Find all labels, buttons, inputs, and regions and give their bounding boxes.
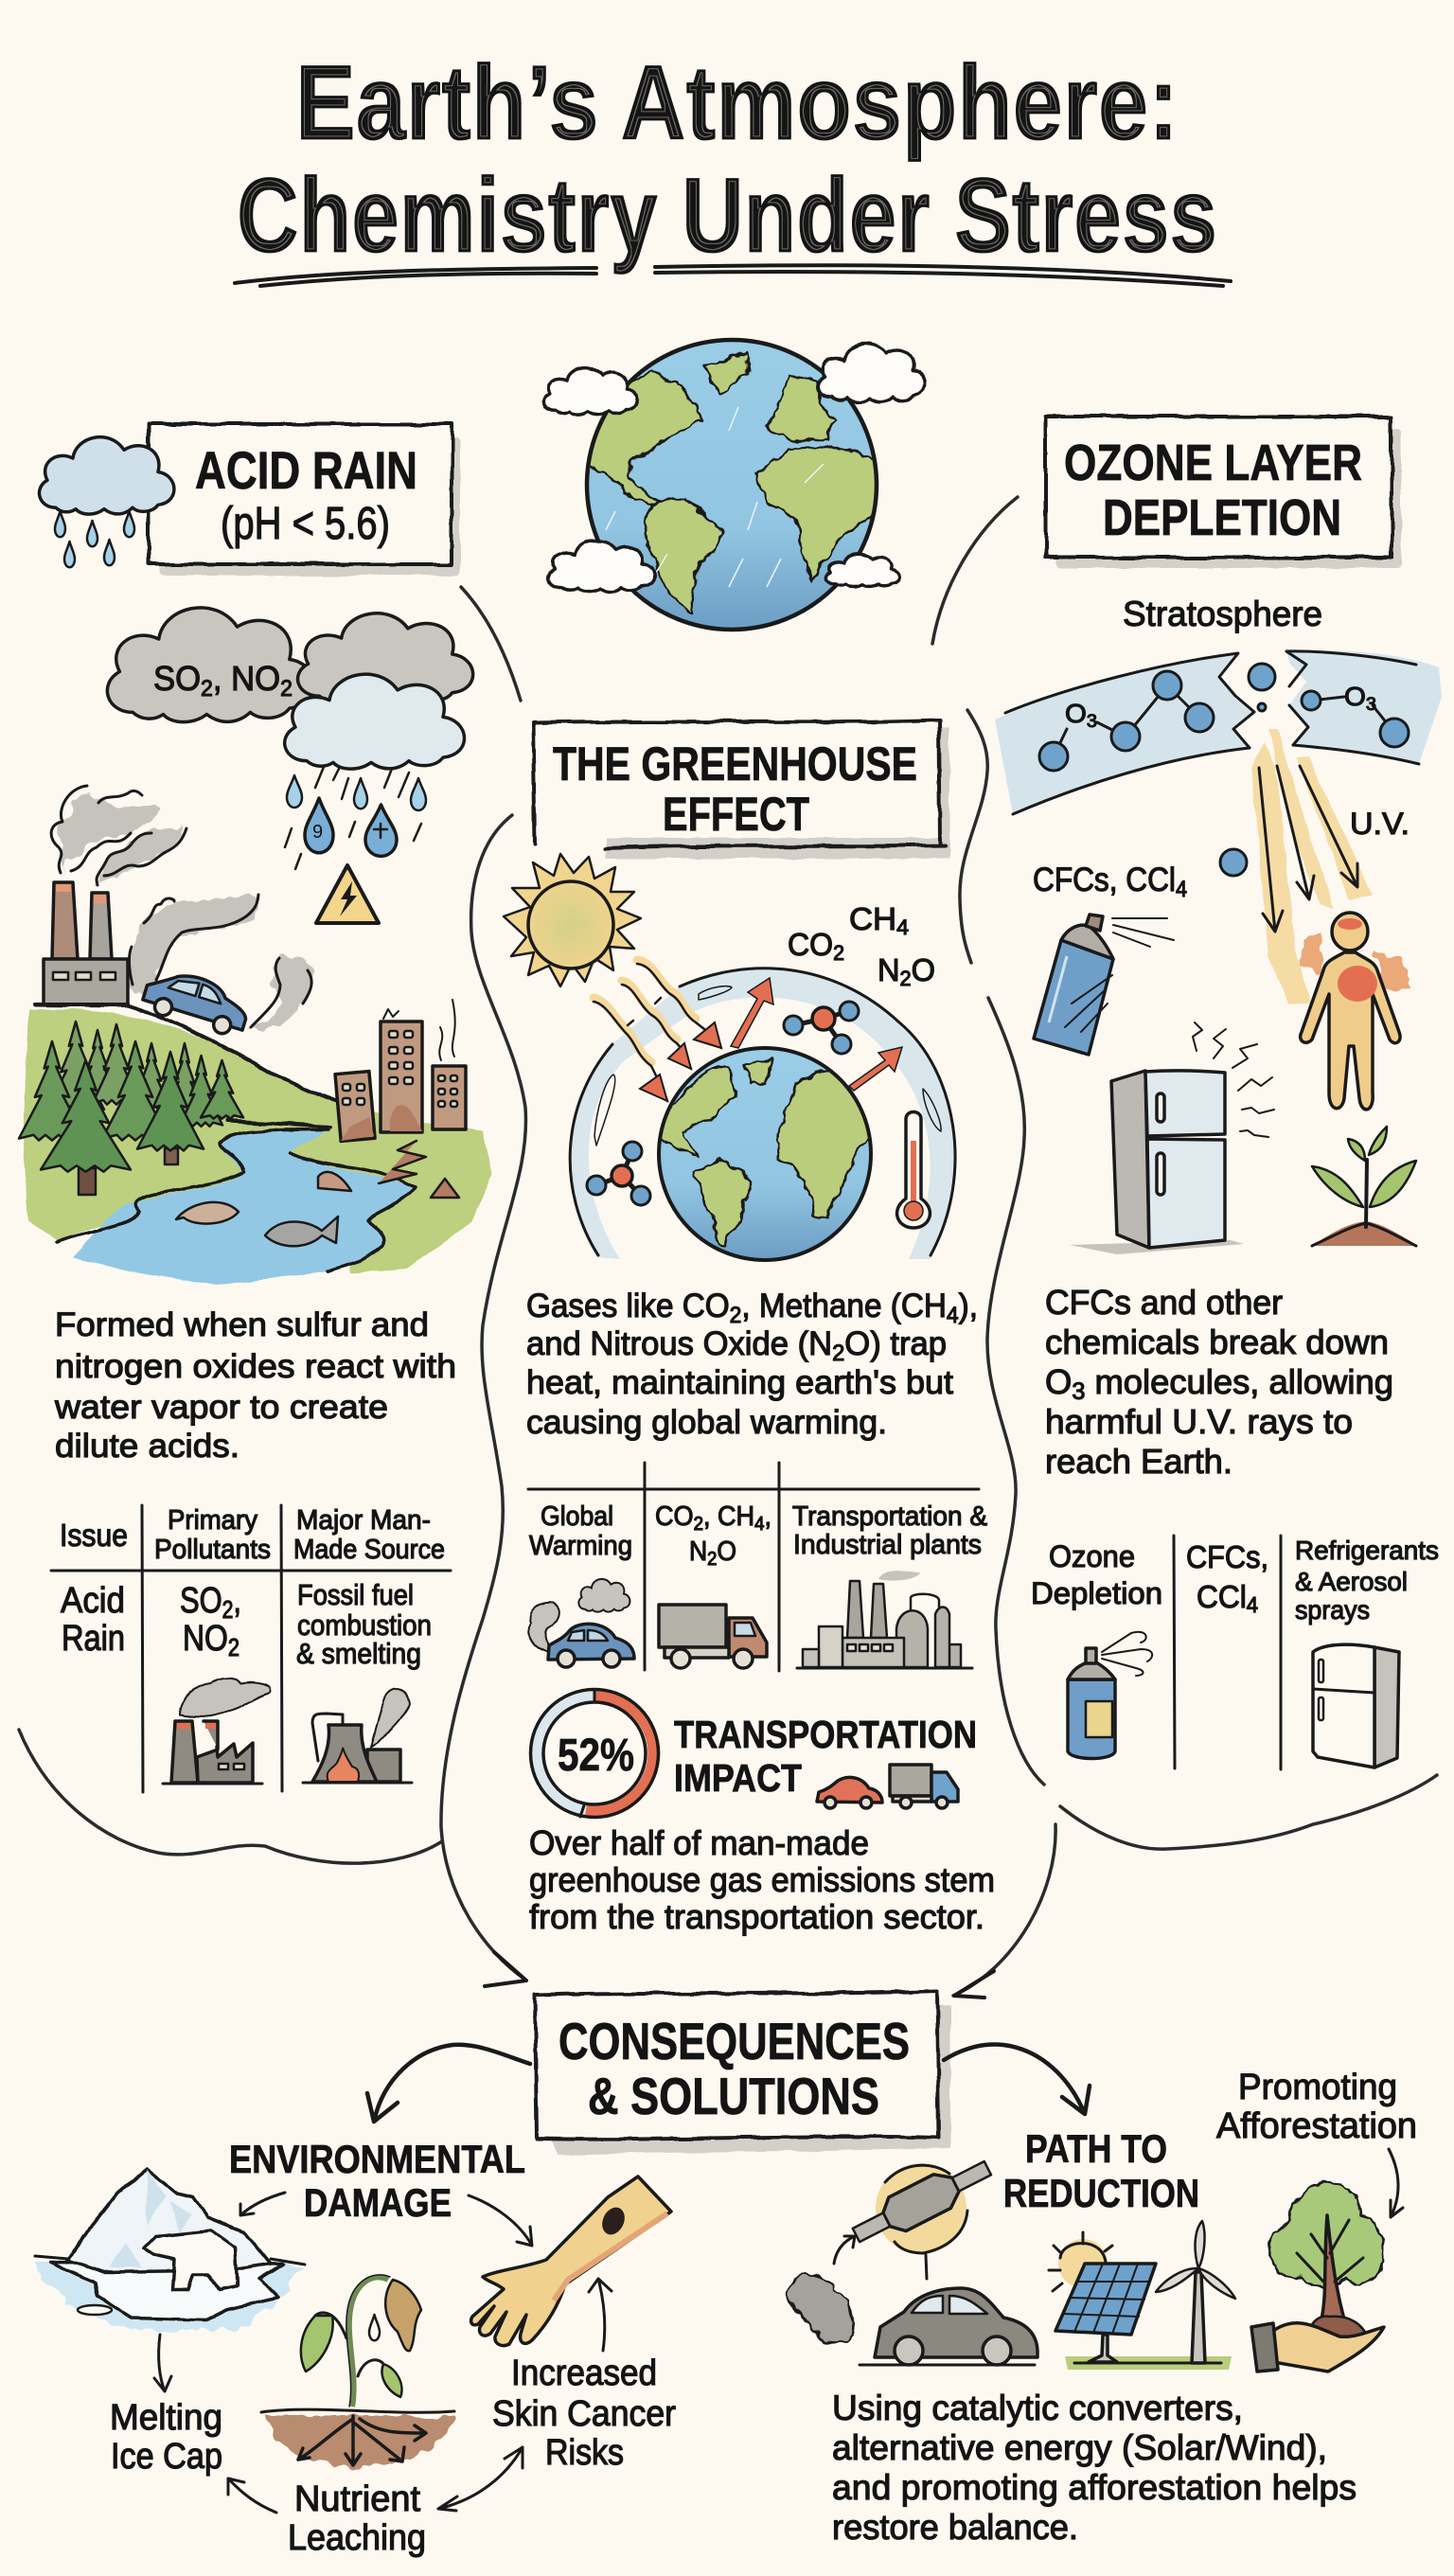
icon: factory xyxy=(163,1679,271,1784)
icon: thermometer xyxy=(897,1111,930,1228)
table: ozone: Ozone xyxy=(1049,1539,1135,1573)
icon: aerosol can xyxy=(1034,915,1174,1055)
text: greenhouse description: ), xyxy=(959,1288,978,1324)
table: acid rain: Primary xyxy=(168,1505,257,1536)
label: CFCs, CCl4: CFCs, CCl xyxy=(1033,862,1191,898)
text: transportation description xyxy=(529,1823,995,1936)
river xyxy=(73,1129,416,1286)
text: greenhouse description: heat, maintaining earth's but xyxy=(526,1364,953,1401)
icon: molecule right xyxy=(784,1002,859,1054)
arrow to tree xyxy=(1389,2149,1403,2217)
heading: acid rain: ACID RAIN xyxy=(195,440,417,500)
heading: consequences & solutions: CONSEQUENCES xyxy=(559,2012,910,2070)
table: ozone xyxy=(1031,1536,1439,1769)
icon: catalytic converter xyxy=(834,2151,996,2279)
heading: ozone layer depletion xyxy=(1046,417,1401,568)
table: greenhouse: Industrial plants xyxy=(793,1530,982,1560)
text: transportation description: from the transportation sector. xyxy=(529,1897,984,1936)
heading: environmental damage xyxy=(229,2137,525,2225)
heading: ozone layer depletion: DEPLETION xyxy=(1103,489,1341,546)
text: transportation description: Over half of man-made xyxy=(529,1823,869,1862)
section: environmental damage xyxy=(35,2137,676,2558)
text: solutions description xyxy=(832,2389,1356,2547)
table: acid rain: SO xyxy=(180,1581,232,1621)
text: ozone description xyxy=(1045,1283,1393,1481)
arrow to ice cap label xyxy=(228,2478,276,2513)
icon: sun xyxy=(504,854,641,986)
heading: environmental damage: ENVIRONMENTAL xyxy=(229,2137,525,2181)
label: increased skin cancer risks: Skin Cancer xyxy=(492,2394,676,2434)
labels: greenhouse gases: 2 xyxy=(900,967,912,990)
table: acid rain: & smelting xyxy=(296,1637,421,1670)
pollutant cloud: , NO xyxy=(213,659,280,698)
table: ozone: 4 xyxy=(1247,1592,1258,1617)
icon: tree in hand xyxy=(1251,2182,1384,2372)
icon: car with smoke xyxy=(529,1579,634,1667)
label: melting ice cap: Ice Cap xyxy=(111,2437,222,2477)
icon: central globe xyxy=(543,340,926,630)
table: greenhouse: 4 xyxy=(754,1514,764,1535)
text: solutions description: Using catalytic converters, xyxy=(832,2389,1243,2427)
table: acid rain: Major Man- xyxy=(296,1505,431,1536)
icon: refrigerator xyxy=(1070,1022,1274,1254)
table: greenhouse: Transportation & xyxy=(792,1501,987,1532)
table: acid rain: Made Source xyxy=(293,1535,445,1565)
icon: red car xyxy=(817,1777,882,1808)
label: nutrient leaching: Leaching xyxy=(288,2518,426,2558)
table: acid rain: combustion xyxy=(297,1608,432,1642)
table: acid rain: Issue xyxy=(60,1518,128,1553)
forest xyxy=(19,1022,243,1195)
heading: path to reduction xyxy=(1003,2126,1199,2215)
labels: greenhouse gases xyxy=(788,901,935,990)
text: solutions description: restore balance. xyxy=(832,2508,1078,2547)
arrows: U.V. rays xyxy=(1220,729,1410,1004)
icon: person with U.V. burns xyxy=(1300,913,1410,1110)
text: greenhouse description: Gases like CO xyxy=(526,1288,740,1324)
label: increased skin cancer risks: Risks xyxy=(545,2433,624,2473)
arrow to environmental damage xyxy=(367,2045,530,2122)
label: nutrient leaching xyxy=(288,2479,426,2558)
heading: path to reduction: PATH TO xyxy=(1025,2126,1167,2171)
table: greenhouse xyxy=(528,1463,987,1671)
label: promoting afforestation: Afforestation xyxy=(1216,2106,1417,2146)
table: greenhouse: Warming xyxy=(529,1531,632,1561)
text: ozone description: reach Earth. xyxy=(1045,1442,1232,1481)
illustration: acid rain landscape xyxy=(19,786,492,1286)
icon: molecule left xyxy=(587,1142,650,1205)
label: melting ice cap: Melting xyxy=(110,2398,222,2438)
heading: acid rain xyxy=(149,424,460,576)
labels: greenhouse gases: CH xyxy=(849,901,895,936)
smoke plumes xyxy=(51,786,312,1029)
table: ozone: CFCs, xyxy=(1186,1539,1268,1574)
arrows: U.V. rays: U.V. xyxy=(1350,807,1410,841)
factory with chimneys xyxy=(35,882,128,1004)
text: ozone description: molecules, allowing xyxy=(1085,1362,1393,1401)
table: ozone: sprays xyxy=(1295,1595,1370,1625)
label: promoting afforestation xyxy=(1216,2068,1417,2146)
text: acid rain description: Formed when sulfur and xyxy=(55,1306,429,1343)
icon: smelter with flame xyxy=(303,1690,412,1783)
labels: greenhouse gases: O xyxy=(912,952,935,987)
text: greenhouse description: and Nitrous Oxide (N xyxy=(526,1325,836,1362)
table: greenhouse: 2 xyxy=(694,1514,703,1535)
labels: greenhouse gases: CO xyxy=(788,927,835,962)
table: greenhouse: O xyxy=(717,1537,736,1567)
panel: acid rain xyxy=(19,424,492,1792)
pollutant cloud xyxy=(107,608,473,722)
icon: earth in dome xyxy=(653,1048,876,1260)
chart: 52% donut xyxy=(530,1689,659,1818)
fish xyxy=(176,1172,351,1246)
labels: greenhouse gases: 2 xyxy=(833,941,844,965)
table: ozone: & Aerosol xyxy=(1295,1567,1408,1596)
labels: greenhouse gases: N xyxy=(878,952,900,987)
arrows: reflected heat xyxy=(731,978,902,1091)
text: greenhouse description: O) trap xyxy=(844,1325,947,1362)
arrow to melting ice cap xyxy=(154,2335,171,2391)
text: ozone description: O xyxy=(1045,1362,1072,1401)
table: greenhouse: CO xyxy=(655,1501,697,1532)
icon: arm with mole xyxy=(471,2176,671,2346)
table: greenhouse: , xyxy=(764,1501,771,1532)
text: greenhouse description: causing global warming. xyxy=(526,1404,887,1441)
icon: rain cloud with acid drops xyxy=(285,674,465,923)
icon: grey car with exhaust xyxy=(789,2273,1037,2365)
text: ozone description: CFCs and other xyxy=(1045,1283,1283,1322)
illustration: broken ozone band: O xyxy=(1065,699,1086,728)
table: greenhouse: 2 xyxy=(707,1549,717,1570)
heading: transportation impact: IMPACT xyxy=(674,1756,802,1800)
illustration: broken ozone band: 3 xyxy=(1087,712,1097,732)
text: greenhouse description: 4 xyxy=(947,1303,959,1328)
text: greenhouse description xyxy=(526,1288,978,1441)
heading: consequences & solutions xyxy=(535,1991,950,2155)
panel: consequences & solutions xyxy=(35,1991,1417,2558)
illustration: broken ozone band: 3 xyxy=(1366,695,1376,715)
title: Earth’s Atmosphere: xyxy=(295,44,1179,162)
illustration: dome xyxy=(570,968,955,1259)
label: increased skin cancer risks: Increased xyxy=(511,2354,657,2393)
text: greenhouse description: , Methane (CH xyxy=(741,1288,947,1324)
table: acid rain: Fossil fuel xyxy=(297,1578,414,1611)
table: greenhouse: N xyxy=(689,1537,709,1567)
icon: small refrigerator xyxy=(1313,1644,1399,1768)
table: acid rain: NO xyxy=(183,1619,237,1659)
text: acid rain description: nitrogen oxides react with xyxy=(55,1348,456,1385)
panel: greenhouse effect xyxy=(504,720,995,1936)
text: ozone description: chemicals break down xyxy=(1045,1323,1389,1361)
illustration: broken ozone band: O xyxy=(1344,682,1365,711)
table: acid rain: , xyxy=(233,1581,241,1621)
illustration: broken ozone band xyxy=(995,650,1442,814)
text: acid rain description: water vapor to create xyxy=(54,1389,388,1426)
table: greenhouse: Global xyxy=(541,1501,613,1532)
arrows: solar radiation xyxy=(594,960,721,1101)
text: acid rain description: dilute acids. xyxy=(55,1428,239,1465)
text: acid rain description xyxy=(54,1306,456,1465)
heading: transportation impact: TRANSPORTATION xyxy=(674,1713,977,1756)
heading: transportation impact xyxy=(674,1713,977,1808)
table: acid rain: Pollutants xyxy=(154,1535,271,1565)
arrow to path to reduction xyxy=(944,2045,1090,2114)
text: ozone description: harmful U.V. rays to xyxy=(1045,1402,1353,1441)
text: greenhouse description: 2 xyxy=(730,1303,741,1328)
icon: industrial plant xyxy=(797,1571,972,1668)
heading: consequences & solutions: & SOLUTIONS xyxy=(588,2067,879,2125)
pollutant cloud: 2 xyxy=(201,676,213,702)
arrows from damage heading xyxy=(240,2193,532,2246)
section: path to reduction xyxy=(789,2068,1417,2547)
icon: truck xyxy=(659,1605,767,1668)
icon: iceberg with polar bear xyxy=(35,2169,305,2331)
table: greenhouse: , CH xyxy=(703,1501,754,1532)
text: solutions description: and promoting afforestation helps xyxy=(832,2468,1356,2507)
icon: small truck xyxy=(890,1765,958,1808)
icon: wilting plant with leached soil xyxy=(261,2275,454,2467)
table: acid rain: Acid xyxy=(61,1581,125,1621)
title: Chemistry Under Stress xyxy=(237,156,1217,275)
chart: 52% donut: 52% xyxy=(558,1731,634,1781)
text: solutions description: alternative energy (Solar/Wind), xyxy=(832,2428,1327,2467)
table: acid rain: 2 xyxy=(228,1633,239,1661)
arrow up to arm xyxy=(589,2279,612,2351)
table: ozone: Refrigerants xyxy=(1295,1536,1439,1565)
heading: the greenhouse effect: THE GREENHOUSE xyxy=(553,737,917,791)
double arrow xyxy=(438,2447,523,2511)
pollutant cloud: SO xyxy=(153,659,203,698)
table: ozone: Depletion xyxy=(1031,1576,1162,1610)
table: acid rain: 2 xyxy=(222,1595,233,1624)
heading: the greenhouse effect xyxy=(533,720,949,859)
label: melting ice cap xyxy=(110,2398,222,2477)
table: acid rain: Rain xyxy=(62,1619,125,1659)
buildings xyxy=(335,1000,466,1198)
icon: car on hill xyxy=(140,964,253,1039)
table: acid rain xyxy=(51,1505,451,1792)
heading: path to reduction: REDUCTION xyxy=(1003,2171,1199,2215)
heading: environmental damage: DAMAGE xyxy=(304,2180,452,2225)
panel: ozone layer depletion xyxy=(995,417,1442,1769)
label: promoting afforestation: Promoting xyxy=(1238,2068,1397,2107)
icon: rain cloud with acid drops: 9 xyxy=(312,822,323,843)
heading: ozone layer depletion: OZONE LAYER xyxy=(1064,435,1362,491)
heading: the greenhouse effect: EFFECT xyxy=(663,788,809,841)
label: CFCs, CCl4: 4 xyxy=(1176,877,1187,902)
title xyxy=(235,44,1231,286)
heading: acid rain: (pH < 5.6) xyxy=(221,499,390,549)
icon: spray can xyxy=(1068,1632,1152,1759)
label: stratosphere: Stratosphere xyxy=(1123,595,1322,633)
icon: rain cloud xyxy=(39,437,174,567)
label: nutrient leaching: Nutrient xyxy=(294,2479,420,2519)
labels: greenhouse gases: 4 xyxy=(896,915,909,939)
icon: seedling xyxy=(1312,1127,1418,1246)
icon: warning triangle xyxy=(316,865,379,923)
text: ozone description: 3 xyxy=(1072,1378,1085,1405)
pollutant cloud: 2 xyxy=(280,676,293,702)
text: transportation description: greenhouse gas emissions stem xyxy=(529,1860,995,1899)
table: ozone: CCl xyxy=(1197,1579,1249,1614)
text: greenhouse description: 2 xyxy=(832,1341,844,1366)
continents on globe xyxy=(577,353,885,613)
icon: sun, solar panel and wind turbine xyxy=(1049,2221,1235,2370)
label: increased skin cancer risks xyxy=(492,2354,676,2473)
panel borders: wavy dividers xyxy=(19,497,1437,1998)
